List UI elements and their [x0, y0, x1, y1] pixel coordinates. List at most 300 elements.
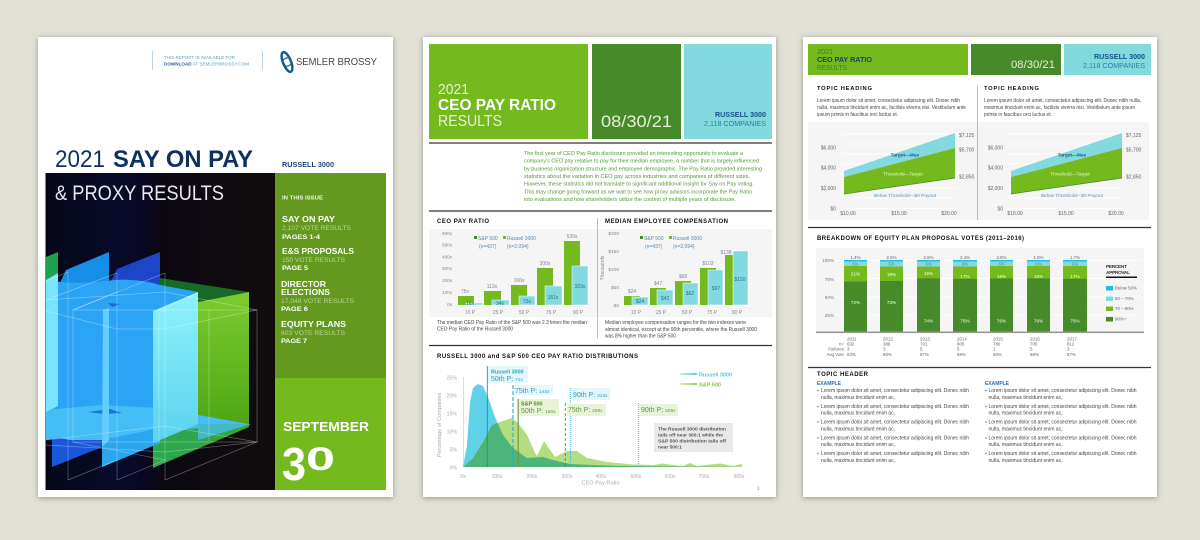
chart: equity plan proposal votes stacked bars: 2014	[957, 336, 967, 342]
panel: topic heading right: $7,125	[1126, 133, 1142, 139]
chart: CEO pay ratio bars: The median CEO Pay Ratio of the S&P 500 was 2.3 times the median	[437, 320, 587, 326]
cover title	[55, 146, 334, 173]
chart: pay ratio distribution areas: 600x	[665, 474, 676, 480]
panel: topic heading left: ipsum primis in faucibus orci luctus et.	[817, 112, 898, 118]
chart: median employee compensation bars: almost identical, except at the 90th percentile, where the Russell 3000	[605, 327, 757, 333]
panel: in this issue: E&S PROPOSALS	[282, 246, 354, 256]
chart: median employee compensation bars: $68	[679, 274, 687, 280]
panel: topic heading left: $2,850	[959, 174, 975, 180]
stacked bar 2014	[953, 260, 977, 332]
header block: index: 2,118 COMPANIES	[1083, 61, 1145, 70]
chart: equity plan proposal votes stacked bars: 389	[883, 342, 891, 346]
chart: equity plan proposal votes stacked bars: 6%	[962, 262, 968, 266]
chart: pay ratio distribution areas: Percentage of Companies	[437, 392, 443, 457]
panel: topic heading right: $6,000	[988, 146, 1003, 152]
callout: distribution note: The Russell 3000 distribution	[658, 426, 726, 432]
chart: pay ratio distribution areas: 15%	[447, 412, 457, 418]
chart: CEO pay ratio bars: S&P 500	[478, 236, 498, 242]
chart: median employee compensation bars: $42	[661, 296, 669, 302]
chart: CEO pay ratio bars: 323x	[575, 284, 586, 290]
list column right: Lorem ipsum dolor sit amet, consectetur adipiscing elit. Donec nibh	[988, 436, 1136, 442]
chart: equity plan proposal votes stacked bars: 2.5%	[923, 255, 934, 260]
chart: pay ratio distribution areas: 5%	[450, 448, 457, 454]
chart: equity plan proposal votes stacked bars: 6%	[1035, 262, 1042, 266]
intro paragraph: statistics about the variation in CEO pay across industries and companies of different sizes.	[524, 174, 750, 180]
chart: equity plan proposal votes stacked bars: 16%	[997, 274, 1006, 279]
chart: median employee compensation bars: Thousands	[600, 255, 606, 280]
chart: pay ratio distribution areas: 300x	[562, 474, 573, 480]
chart: median employee compensation bars: $50	[611, 285, 619, 291]
chart: median employee compensation bars: 10 P	[631, 310, 642, 316]
chart: equity plan proposal votes stacked bars: 2015	[993, 336, 1003, 342]
list column right: Lorem ipsum dolor sit amet, consectetur adipiscing elit. Donec nibh	[988, 420, 1136, 426]
chart: CEO pay ratio bars	[429, 219, 597, 332]
list column left: nulla, maximus tincidunt enim ac,	[821, 410, 895, 416]
chart: equity plan proposal votes stacked bars: 2.4%	[960, 255, 970, 260]
list column left: nulla, maximus tincidunt enim ac,	[821, 442, 895, 448]
callout: distribution note: tails off near 300:1 while the	[658, 432, 723, 438]
callout: S&P 75th percentile	[565, 403, 606, 467]
list column right: nulla, maximus tincidunt enim ac,	[988, 458, 1063, 464]
chart: equity plan proposal votes stacked bars: 2.8%	[996, 255, 1007, 260]
chart: equity plan proposal votes stacked bars: 87%	[920, 352, 929, 357]
callout: S&P 50th percentile: 50th P: 160x	[521, 408, 556, 415]
stacked bar 2017	[1063, 260, 1087, 332]
chart: equity plan proposal votes stacked bars: 3	[1067, 346, 1070, 352]
chart: equity plan proposal votes stacked bars: 6%	[852, 262, 859, 266]
panel: topic heading right: TOPIC HEADING	[984, 86, 1039, 92]
list column right: Lorem ipsum dolor sit amet, consectetur adipiscing elit. Donec nibh	[988, 388, 1136, 394]
chart: CEO pay ratio bars: 200x	[442, 278, 453, 283]
panel: topic heading right: Below Threshold—$0 Payout	[1041, 193, 1104, 199]
header block: index: 2,118 COMPANIES	[704, 119, 766, 128]
panel: topic heading right: $15.00	[1058, 211, 1074, 217]
chart: equity plan proposal votes stacked bars: 76%	[1034, 318, 1043, 324]
chart: CEO pay ratio bars: 75 P	[546, 310, 557, 316]
chart: equity plan proposal votes stacked bars: 15%	[924, 271, 933, 276]
chart: equity plan proposal votes stacked bars: 88%	[1030, 352, 1039, 357]
panel: topic heading right: Threshold—Target	[1050, 172, 1090, 178]
list column left: nulla, maximus tincidunt enim ac,	[821, 395, 895, 401]
list column left: nulla, maximus tincidunt enim ac,	[821, 426, 895, 432]
list column left: Lorem ipsum dolor sit amet, consectetur adipiscing elit. Donec nibh	[821, 388, 969, 394]
panel: topic heading right: $20.00	[1108, 211, 1124, 217]
chart: equity plan proposal votes stacked bars: 83%	[847, 352, 856, 357]
panel: topic heading right: $2,000	[988, 186, 1003, 192]
chart: equity plan proposal votes stacked bars: 3	[883, 346, 886, 352]
chart: equity plan proposal votes stacked bars: 5	[1030, 346, 1033, 352]
callout: Russell 90th percentile: 90th P: 313x	[573, 392, 608, 399]
panel: topic heading right: Lorem ipsum dolor sit amet, consectetur adipiscing elit. Donec nibh nulla,	[984, 98, 1141, 104]
panel: topic heading left: Below Threshold—$0 Payout	[874, 193, 937, 199]
chart: equity plan proposal votes stacked bars: 5	[957, 346, 960, 352]
panel: in this issue: IN THIS ISSUE	[282, 196, 324, 202]
panel: topic heading right: $0	[997, 206, 1003, 212]
intro paragraph: The first year of CEO Pay Ratio disclosure provided an interesting opportunity to evaluate a	[524, 151, 744, 157]
header block: title: 2021	[817, 47, 833, 56]
callout: S&P 50th percentile	[518, 399, 559, 467]
chart: median employee compensation bars: 75 P	[707, 310, 718, 316]
panel: in this issue: DIRECTOR	[281, 279, 327, 289]
chart: pay ratio distribution areas: RUSSELL 3000 and S&P 500 CEO PAY RATIO DISTRIBUTIONS	[437, 354, 638, 360]
chart: median employee compensation bars: (n=437)	[645, 244, 663, 250]
intro paragraph	[524, 151, 762, 203]
callout: Russell 90th percentile	[570, 388, 610, 467]
chart: equity plan proposal votes stacked bars: 88%	[957, 352, 966, 357]
chart: equity plan proposal votes stacked bars: 21%	[851, 272, 860, 276]
stacked bar 2015	[990, 260, 1013, 332]
chart: equity plan proposal votes stacked bars: 2.6%	[886, 255, 897, 260]
legend: percent approval: Below 50%	[1115, 286, 1137, 290]
chart: CEO pay ratio bars: 151x	[548, 295, 559, 301]
header block: index	[684, 44, 772, 139]
cover title: 2021	[55, 146, 105, 173]
legend: percent approval: APPROVAL	[1106, 270, 1130, 276]
chart: equity plan proposal votes stacked bars: 632	[847, 342, 855, 346]
chart: pay ratio distribution areas: 500x	[631, 474, 642, 480]
panel: topic heading left: Threshold—Target	[883, 172, 923, 178]
list column left: Lorem ipsum dolor sit amet, consectetur adipiscing elit. Donec nibh	[821, 420, 969, 426]
chart: CEO pay ratio bars: 300x	[540, 261, 551, 267]
chart: CEO pay ratio bars: (n=2,094)	[507, 244, 529, 250]
intro paragraph: However, these statistics did not translate to significant additional insight for Say on Pay voting.	[524, 182, 754, 188]
header block: title: 2021	[438, 81, 469, 98]
panel: issue date: SEPTEMBER	[283, 420, 369, 434]
panel: topic heading right: Target—Max	[1058, 152, 1087, 158]
callout: Russell 75th percentile	[513, 385, 553, 467]
panel: issue date: 3	[282, 438, 306, 490]
chart: equity plan proposal votes stacked bars: 805	[957, 342, 965, 346]
panel: in this issue: PAGE 5	[282, 265, 309, 272]
panel: in this issue: ELECTIONS	[281, 287, 330, 297]
chart: equity plan proposal votes stacked bars: 2016	[1030, 336, 1040, 342]
chart: CEO pay ratio bars: 600x	[442, 231, 453, 236]
chart: CEO pay ratio bars: Russell 3000	[507, 236, 536, 242]
chart: CEO pay ratio bars: 75x	[461, 289, 470, 295]
chart: CEO pay ratio bars: 50 P	[519, 310, 530, 316]
stacked bar 2016	[1027, 260, 1050, 332]
panel: in this issue: EQUITY PLANS	[281, 319, 346, 329]
header block: index	[1064, 44, 1151, 75]
header block: index: RUSSELL 3000	[715, 110, 766, 119]
panel: topic heading right: primis in faucibus orci luctus et.	[984, 112, 1052, 118]
chart: median employee compensation bars: S&P 500	[644, 236, 664, 242]
chart: equity plan proposal votes stacked bars: 5	[920, 346, 923, 352]
chart: median employee compensation bars: $47	[654, 281, 662, 287]
chart: equity plan proposal votes stacked bars: Avg Vote	[826, 352, 845, 357]
chart: pay ratio distribution areas: 200x	[527, 474, 538, 480]
chart: median employee compensation bars: Median employee compensation ranges for the two indexes were	[605, 320, 746, 326]
chart: median employee compensation bars: was 8% higher than the S&P 500	[604, 334, 676, 340]
chart: median employee compensation bars: 50 P	[682, 310, 693, 316]
callout: distribution note: near 500:1	[658, 444, 682, 450]
chart: median employee compensation bars: $138	[720, 250, 732, 256]
panel: in this issue: PAGES 1-4	[282, 234, 321, 241]
wireframe boxes	[46, 272, 257, 480]
chart: equity plan proposal votes stacked bars: Failures	[828, 346, 845, 352]
panel: in this issue: PAGE 7	[281, 338, 308, 345]
chart: median employee compensation bars: $24	[636, 299, 644, 305]
chart: equity plan proposal votes stacked bars: 2017	[1067, 336, 1077, 342]
chart: median employee compensation bars: 25 P	[656, 310, 667, 316]
callout: Russell 50th percentile	[487, 366, 528, 467]
panel: topic heading left: Lorem ipsum dolor sit amet, consectetur adipiscing elit. Donec nibh	[817, 98, 960, 104]
intro paragraph: This may change going forward as we wait to see how proxy advisors incorporate the Pay Ratio	[524, 189, 752, 195]
chart: median employee compensation bars: 90 P	[732, 310, 743, 316]
chart: median employee compensation bars: $150	[608, 249, 619, 255]
chart: equity plan proposal votes stacked bars: 3	[847, 346, 850, 352]
callout: S&P 90th percentile: 90th P: 509x	[641, 407, 676, 414]
header block: title	[808, 44, 968, 75]
header block: title: CEO PAY RATIO	[438, 97, 556, 114]
page: CEO pay ratio results	[423, 37, 776, 497]
legend: percent approval: 50 – 70%	[1115, 296, 1134, 301]
chart: pay ratio distribution areas: 0%	[450, 466, 457, 472]
panel: topic heading left: $6,000	[821, 146, 836, 152]
panel: topic heading right	[984, 86, 1142, 217]
chart: equity plan proposal votes stacked bars: 86%	[883, 352, 892, 357]
chart: median employee compensation bars: Russell 3000	[673, 236, 702, 242]
panel: topic heading left: nulla, maximus tincidunt enim ac, facilisis viverra nisi. Vestibulum ante	[817, 105, 966, 111]
chart: equity plan proposal votes stacked bars: 812	[1067, 342, 1075, 346]
panel: topic heading left: $10.00	[840, 211, 856, 217]
header block: title: CEO PAY RATIO	[817, 55, 872, 64]
callout: S&P 50th percentile: S&P 500	[521, 402, 542, 408]
chart: median employee compensation bars: MEDIAN EMPLOYEE COMPENSATION	[605, 219, 728, 225]
panel: topic heading left: $4,000	[821, 166, 836, 172]
list column left: Lorem ipsum dolor sit amet, consectetur adipiscing elit. Donec nibh	[821, 436, 969, 442]
callout: Russell 50th percentile: Russell 3000	[491, 370, 524, 376]
chart: equity plan proposal votes stacked bars: n=	[839, 342, 844, 346]
chart: CEO pay ratio bars: 300x	[442, 266, 453, 271]
list column right: nulla, maximus tincidunt enim ac,	[988, 442, 1063, 448]
chart: median employee compensation bars: $62	[686, 291, 694, 297]
chart: equity plan proposal votes stacked bars: 16%	[1034, 274, 1043, 279]
chart: CEO pay ratio bars: 113x	[487, 284, 498, 290]
list column left	[817, 381, 969, 464]
legend: percent approval: 70 – 90%	[1115, 306, 1134, 311]
chart: pay ratio distribution areas: 20%	[447, 394, 457, 400]
chart: median employee compensation bars: $24	[628, 289, 636, 295]
cover download note: DOWNLOAD AT SEMLERBROSSY.COM	[164, 62, 249, 66]
list column right: Lorem ipsum dolor sit amet, consectetur adipiscing elit. Donec nibh	[988, 451, 1136, 457]
chart: CEO pay ratio bars: 0x	[447, 302, 453, 307]
list column left: nulla, maximus tincidunt enim ac,	[821, 458, 895, 464]
callout: S&P 75th percentile: 75th P: 298x	[568, 407, 603, 414]
chart: equity plan proposal votes stacked bars: 17%	[1070, 274, 1080, 279]
chart: equity plan proposal votes stacked bars: 6%	[888, 262, 895, 266]
chart: equity plan proposal votes stacked bars: 6%	[1072, 262, 1078, 266]
chart: equity plan proposal votes stacked bars: 701	[920, 342, 928, 346]
chart: pay ratio distribution areas: CEO Pay Ratio	[582, 480, 619, 486]
panel: topic heading left: $0	[830, 206, 836, 212]
panel: topic header with example lists: TOPIC HEADER	[817, 372, 869, 378]
chart: equity plan proposal votes stacked bars: 73%	[887, 300, 896, 305]
panel: topic heading left: $7,125	[959, 133, 975, 139]
chart: equity plan proposal votes stacked bars: BREAKDOWN OF EQUITY PLAN PROPOSAL VOTES (2011–2016)	[817, 236, 1024, 242]
panel: topic heading right: $4,000	[988, 166, 1003, 172]
chart: pay ratio distribution areas: 25%	[447, 376, 457, 382]
panel: topic heading right: $5,700	[1126, 148, 1142, 154]
chart: equity plan proposal votes stacked bars: 1.7%	[1070, 255, 1080, 260]
header block: title	[429, 44, 588, 139]
chart legend: S&P 500	[699, 382, 721, 388]
callout: distribution note: S&P 500 distribution tails off	[658, 438, 726, 444]
list column left: Lorem ipsum dolor sit amet, consectetur adipiscing elit. Donec nibh	[821, 404, 969, 410]
chart: equity plan proposal votes stacked bars: 705	[1030, 342, 1038, 346]
header block: title: RESULTS	[438, 113, 502, 130]
panel: topic heading right: $2,850	[1126, 174, 1142, 180]
chart: CEO pay ratio bars: 73x	[523, 299, 532, 305]
panel: in this issue: SAY ON PAY	[282, 214, 335, 224]
chart: CEO pay ratio bars: 16x	[466, 301, 475, 307]
chart: equity plan proposal votes stacked bars: 90%	[993, 352, 1002, 357]
page: report cover	[38, 37, 393, 497]
cover subtitle: & PROXY RESULTS	[55, 182, 224, 205]
chart: equity plan proposal votes stacked bars: 75%	[1070, 318, 1080, 324]
chart: pay ratio distribution areas: 800x	[734, 474, 745, 480]
chart: CEO pay ratio bars: 530x	[567, 234, 578, 240]
chart: equity plan proposal votes stacked bars: 25%	[825, 313, 834, 318]
chart: equity plan proposal votes stacked bars: 72%	[851, 300, 860, 305]
panel: topic heading left: TOPIC HEADING	[817, 86, 872, 92]
chart: equity plan proposal votes stacked bars: 2012	[883, 336, 893, 342]
chart: equity plan proposal votes stacked bars	[816, 236, 1144, 357]
chart: median employee compensation bars: $97	[712, 286, 720, 292]
chart: CEO pay ratio bars: 166x	[514, 278, 525, 284]
callout: Russell 75th percentile: 75th P: 145x	[515, 388, 550, 395]
panel: in this issue: 2,107 VOTE RESULTS	[282, 225, 352, 232]
chart: equity plan proposal votes stacked bars: 1.4%	[850, 255, 861, 260]
header block: date: 08/30/21	[601, 112, 672, 131]
panel: in this issue: PAGE 6	[281, 306, 309, 313]
panel: in this issue: 603 VOTE RESULTS	[281, 330, 346, 337]
stacked bar 2012	[880, 260, 903, 332]
header block: date	[971, 44, 1061, 75]
panel: issue date	[275, 378, 386, 490]
chart: equity plan proposal votes stacked bars: 6%	[998, 262, 1005, 266]
chart: median employee compensation bars: $200	[608, 231, 619, 237]
panel: topic heading left: Target—Max	[891, 152, 920, 158]
chart: equity plan proposal votes stacked bars: 6%	[925, 262, 932, 266]
header block: index: RUSSELL 3000	[1094, 52, 1145, 61]
chart: CEO pay ratio bars: 100x	[442, 290, 453, 295]
intro paragraph: company's CEO pay relative to pay for their median employee, a number that is largely influenced	[524, 159, 759, 165]
chart: pay ratio distribution areas: 10%	[447, 430, 457, 436]
chart: median employee compensation bars: $150	[734, 277, 746, 283]
icon: Semler Brossy logo: SEMLER BROSSY	[296, 56, 377, 68]
list column right: nulla, maximus tincidunt enim ac,	[988, 426, 1063, 432]
chart: equity plan proposal votes stacked bars: 100%	[822, 258, 834, 263]
chart: pay ratio distribution areas	[437, 354, 760, 490]
chart: median employee compensation bars: $100	[608, 267, 619, 273]
chart: equity plan proposal votes stacked bars: 75%	[960, 318, 970, 324]
cover title: SAY ON PAY	[113, 146, 253, 173]
chart: equity plan proposal votes stacked bars: 1	[993, 346, 996, 352]
intro paragraph: by business organization structure and employee demographic. The Pay Ratio provided interesting	[524, 166, 762, 172]
chart: equity plan proposal votes stacked bars: 87%	[1067, 352, 1076, 357]
chart: CEO pay ratio bars: 500x	[442, 242, 453, 248]
panel: topic heading right: maximus tincidunt enim ac, facilisis viverra nisi. Vestibulum ante ipsum	[984, 105, 1135, 111]
chart: equity plan proposal votes stacked bars: 1.8%	[1033, 255, 1044, 260]
legend: percent approval: 90%+	[1115, 316, 1127, 322]
chart legend: Russell 3000	[699, 372, 732, 378]
chart: equity plan proposal votes stacked bars: 74%	[924, 318, 933, 324]
chart: median employee compensation bars: $0	[614, 303, 619, 309]
page number: 1	[757, 486, 760, 490]
legend: percent approval	[1106, 264, 1137, 322]
header block: title: RESULTS	[817, 63, 847, 72]
panel: issue date: 0	[306, 441, 335, 477]
chart: equity plan proposal votes stacked bars: 76%	[997, 318, 1006, 324]
chart: pay ratio distribution areas: 100x	[492, 474, 503, 480]
stacked bar 2011	[844, 260, 867, 332]
panel: topic heading left: $15.00	[891, 211, 907, 217]
cover download note: THIS REPORT IS AVAILABLE FOR	[164, 55, 236, 60]
legend: percent approval: PERCENT	[1106, 264, 1127, 270]
panel: topic heading left: $5,700	[959, 148, 975, 154]
panel: topic heading right: $10.00	[1007, 211, 1023, 217]
chart: CEO pay ratio bars: 34x	[496, 301, 505, 307]
chart: equity plan proposal votes stacked bars: 786	[993, 342, 1001, 346]
chart: CEO pay ratio bars: 90 P	[573, 310, 584, 316]
callout: S&P 90th percentile	[638, 403, 678, 467]
list column right: nulla, maximus tincidunt enim ac,	[988, 410, 1063, 416]
panel: topic heading left: $20.00	[941, 211, 957, 217]
chart legend	[680, 372, 732, 388]
panel: in this issue: 17,048 VOTE RESULTS	[281, 298, 355, 305]
chart: equity plan proposal votes stacked bars: 2011	[847, 336, 857, 342]
chart: equity plan proposal votes stacked bars: 19%	[887, 272, 896, 277]
list column left: EXAMPLE	[817, 381, 842, 387]
list column left: Lorem ipsum dolor sit amet, consectetur adipiscing elit. Donec nibh	[821, 451, 969, 457]
list column right: EXAMPLE	[985, 381, 1010, 387]
chart background	[808, 122, 1149, 220]
list column right	[985, 381, 1136, 464]
chart: CEO pay ratio bars: CEO PAY RATIO	[437, 219, 489, 225]
chart: CEO pay ratio bars: 400x	[442, 254, 453, 260]
chart: equity plan proposal votes stacked bars: 75%	[825, 277, 834, 282]
chart: equity plan proposal votes stacked bars: 17%	[960, 274, 970, 279]
cover artwork: translucent 3D planes	[46, 173, 275, 490]
icon: Semler Brossy logo	[279, 51, 377, 73]
callout: distribution note	[654, 423, 733, 452]
list column right: Lorem ipsum dolor sit amet, consectetur adipiscing elit. Donec nibh	[988, 404, 1136, 410]
header block: date: 08/30/21	[1011, 59, 1055, 71]
stacked bar 2013	[917, 260, 940, 332]
chart: CEO pay ratio bars: (n=437)	[479, 244, 497, 250]
chart: equity plan proposal votes stacked bars: 50%	[825, 295, 834, 300]
chart: median employee compensation bars: (n=2,094)	[673, 244, 695, 250]
list column right: nulla, maximus tincidunt enim ac,	[988, 395, 1063, 401]
cover title: RUSSELL 3000	[282, 160, 334, 169]
header block: date	[592, 44, 681, 139]
chart: median employee compensation bars: $103	[702, 261, 714, 267]
chart: pay ratio distribution areas: 0x	[460, 474, 466, 480]
panel: in this issue	[275, 173, 386, 378]
chart: CEO pay ratio bars: 25 P	[493, 310, 504, 316]
page: topic template	[803, 37, 1157, 497]
panel: in this issue: 150 VOTE RESULTS	[282, 257, 346, 264]
chart: median employee compensation bars	[598, 219, 772, 340]
chart: CEO pay ratio bars: 10 P	[465, 310, 476, 316]
callout: Russell 50th percentile: 50th P: 71x	[491, 376, 523, 383]
panel: topic heading left	[817, 86, 975, 217]
chart: equity plan proposal votes stacked bars: 2013	[920, 336, 930, 342]
cover download note	[152, 51, 262, 70]
chart: pay ratio distribution areas: 700x	[699, 474, 710, 480]
intro paragraph: into evaluations and how shareholders utilize the context of multiple years of disclosure.	[524, 197, 736, 203]
